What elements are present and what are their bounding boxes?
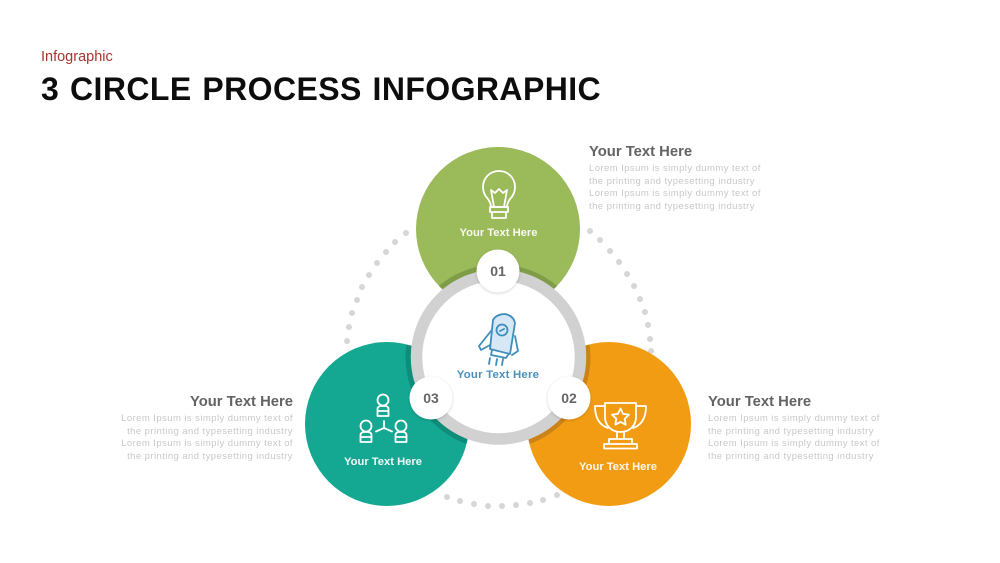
text block: right: Lorem Ipsum is simply dummy text of xyxy=(708,438,880,449)
green label: Your Text Here xyxy=(460,227,537,239)
text block: right: Your Text Here xyxy=(708,394,811,410)
text block: left: Lorem Ipsum is simply dummy text of xyxy=(121,438,293,449)
icon: trophy xyxy=(595,403,646,448)
dotted arc xyxy=(344,228,654,509)
text block: right xyxy=(708,394,880,462)
green circle xyxy=(416,147,580,290)
text block: top right xyxy=(589,144,761,212)
text block: left: Your Text Here xyxy=(190,394,293,410)
badge 01: 01 xyxy=(490,263,506,279)
text block: top right: Lorem Ipsum is simply dummy text of xyxy=(589,188,761,199)
icon: light bulb xyxy=(483,171,515,218)
badge 02 xyxy=(547,376,591,421)
badge 03 xyxy=(409,376,453,421)
icon: network of people xyxy=(360,394,406,442)
text block: right: the printing and typesetting industry xyxy=(708,451,874,462)
text block: top right: the printing and typesetting industry xyxy=(589,201,755,212)
text block: left: the printing and typesetting industry xyxy=(127,426,293,437)
badge 02: 02 xyxy=(561,390,577,406)
text block: left: the printing and typesetting industry xyxy=(127,451,293,462)
center label: Your Text Here xyxy=(457,369,539,381)
text block: top right: Lorem Ipsum is simply dummy text of xyxy=(589,163,761,174)
badge 03: 03 xyxy=(423,390,439,406)
text block: right: the printing and typesetting industry xyxy=(708,426,874,437)
text block: top right: the printing and typesetting industry xyxy=(589,176,755,187)
icon: rocket xyxy=(479,314,518,365)
text block: left: Lorem Ipsum is simply dummy text of xyxy=(121,413,293,424)
text block: left xyxy=(121,394,293,462)
orange circle xyxy=(528,342,691,506)
badge 01 xyxy=(476,250,520,294)
text block: top right: Your Text Here xyxy=(589,144,692,160)
teal circle xyxy=(305,342,468,506)
subtitle: Infographic xyxy=(41,49,113,65)
title: 3 CIRCLE PROCESS INFOGRAPHIC xyxy=(41,71,601,107)
teal label: Your Text Here xyxy=(344,456,422,468)
orange label: Your Text Here xyxy=(579,461,657,473)
text block: right: Lorem Ipsum is simply dummy text of xyxy=(708,413,880,424)
center ring xyxy=(416,275,580,439)
